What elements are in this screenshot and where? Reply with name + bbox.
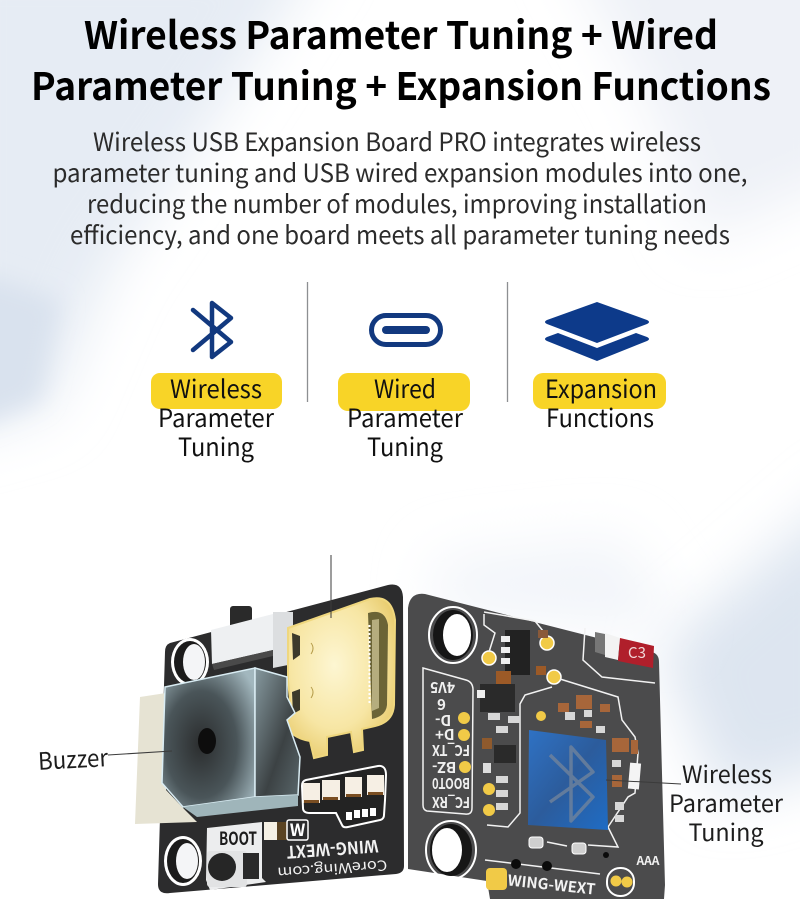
label: wired parameter tuning: Parameter <box>347 399 463 435</box>
pin label panel: BZ- <box>432 757 456 778</box>
capacitor c3 <box>595 632 654 668</box>
callout: buzzer: Buzzer <box>37 738 109 777</box>
mounting hole: bottom <box>426 821 476 879</box>
title: Parameter Tuning + Expansion Functions <box>31 56 771 111</box>
solder pads <box>482 636 561 816</box>
description text: parameter tuning and USB wired expansion modules into one, <box>52 154 748 190</box>
mounting hole: top <box>171 638 209 686</box>
yellow highlight: wired <box>338 373 470 411</box>
description text: reducing the number of modules, improving installation <box>87 185 707 221</box>
label: expansion functions: Expansion <box>545 370 657 406</box>
label: wireless parameter tuning: Wireless <box>170 370 262 406</box>
pin label panel: 4V5 <box>430 677 455 698</box>
mounting hole: bottom <box>164 836 202 886</box>
capacitor c3: C3 <box>628 642 646 663</box>
status leds <box>302 766 386 827</box>
callout: wireless parameter tuning: Tuning <box>688 813 764 848</box>
feature: expansion functions <box>533 302 666 435</box>
label: wired parameter tuning: Tuning <box>367 428 443 464</box>
buzzer <box>162 668 300 817</box>
slide switch <box>211 606 293 670</box>
left circuit board <box>135 584 404 893</box>
boot button panel: W <box>290 816 306 841</box>
feature: wired parameter tuning <box>338 316 470 464</box>
label: wireless parameter tuning <box>158 370 274 464</box>
callout: usb-c leader line <box>330 555 332 618</box>
circuit traces <box>484 612 655 874</box>
board silkscreen text: CoreWing.com <box>277 855 388 883</box>
right circuit board <box>408 594 665 899</box>
feature: wireless parameter tuning <box>151 303 282 464</box>
icon: usb-c port <box>372 316 440 344</box>
callout: wireless parameter tuning <box>606 755 784 848</box>
pin label panel: 6 <box>437 694 446 715</box>
label: expansion functions <box>545 370 657 435</box>
pin label panel: FC_TX <box>432 740 470 761</box>
description text <box>52 123 748 252</box>
mounting hole: top <box>429 607 477 663</box>
icon: stacked layers <box>545 302 649 361</box>
yellow highlight: expansion <box>533 373 666 409</box>
board silkscreen text <box>277 835 388 883</box>
pin label panel <box>423 668 473 814</box>
label: wired parameter tuning <box>347 370 463 464</box>
label: wireless parameter tuning: Tuning <box>178 428 254 464</box>
label: wired parameter tuning: Wired <box>374 370 436 406</box>
board body <box>158 584 404 893</box>
description text: efficiency, and one board meets all parameter tuning needs <box>70 216 730 252</box>
title <box>31 5 771 111</box>
bottom board markings: WING-WEXT <box>507 869 596 899</box>
bluetooth chip <box>528 730 608 830</box>
bottom board markings <box>486 852 660 899</box>
callout: wireless parameter tuning: Wireless <box>682 755 772 790</box>
board silkscreen text: WING-WEXT <box>285 835 379 866</box>
electronic components <box>477 630 641 854</box>
label: wireless parameter tuning: Parameter <box>158 399 274 435</box>
yellow highlight: wireless <box>151 373 282 409</box>
bottom board markings: AAA <box>635 852 660 869</box>
usb-c connector <box>285 598 395 758</box>
callout: wireless parameter tuning: Parameter <box>669 784 784 819</box>
white plug housing <box>135 693 197 824</box>
pin label panel: BOOT0 <box>432 773 470 794</box>
label: expansion functions: Functions <box>546 399 654 435</box>
pin label panel: D+ <box>435 724 455 745</box>
description text: Wireless USB Expansion Board PRO integrates wireless <box>93 123 701 159</box>
callout: buzzer <box>37 738 172 777</box>
title: Wireless Parameter Tuning + Wired <box>84 5 718 60</box>
boot button panel <box>206 816 308 890</box>
icon: bluetooth <box>193 303 231 357</box>
board body <box>408 594 665 899</box>
pin label panel: FC_RX <box>432 792 470 813</box>
pin label panel: D- <box>435 710 451 731</box>
boot button panel: BOOT <box>219 825 257 851</box>
